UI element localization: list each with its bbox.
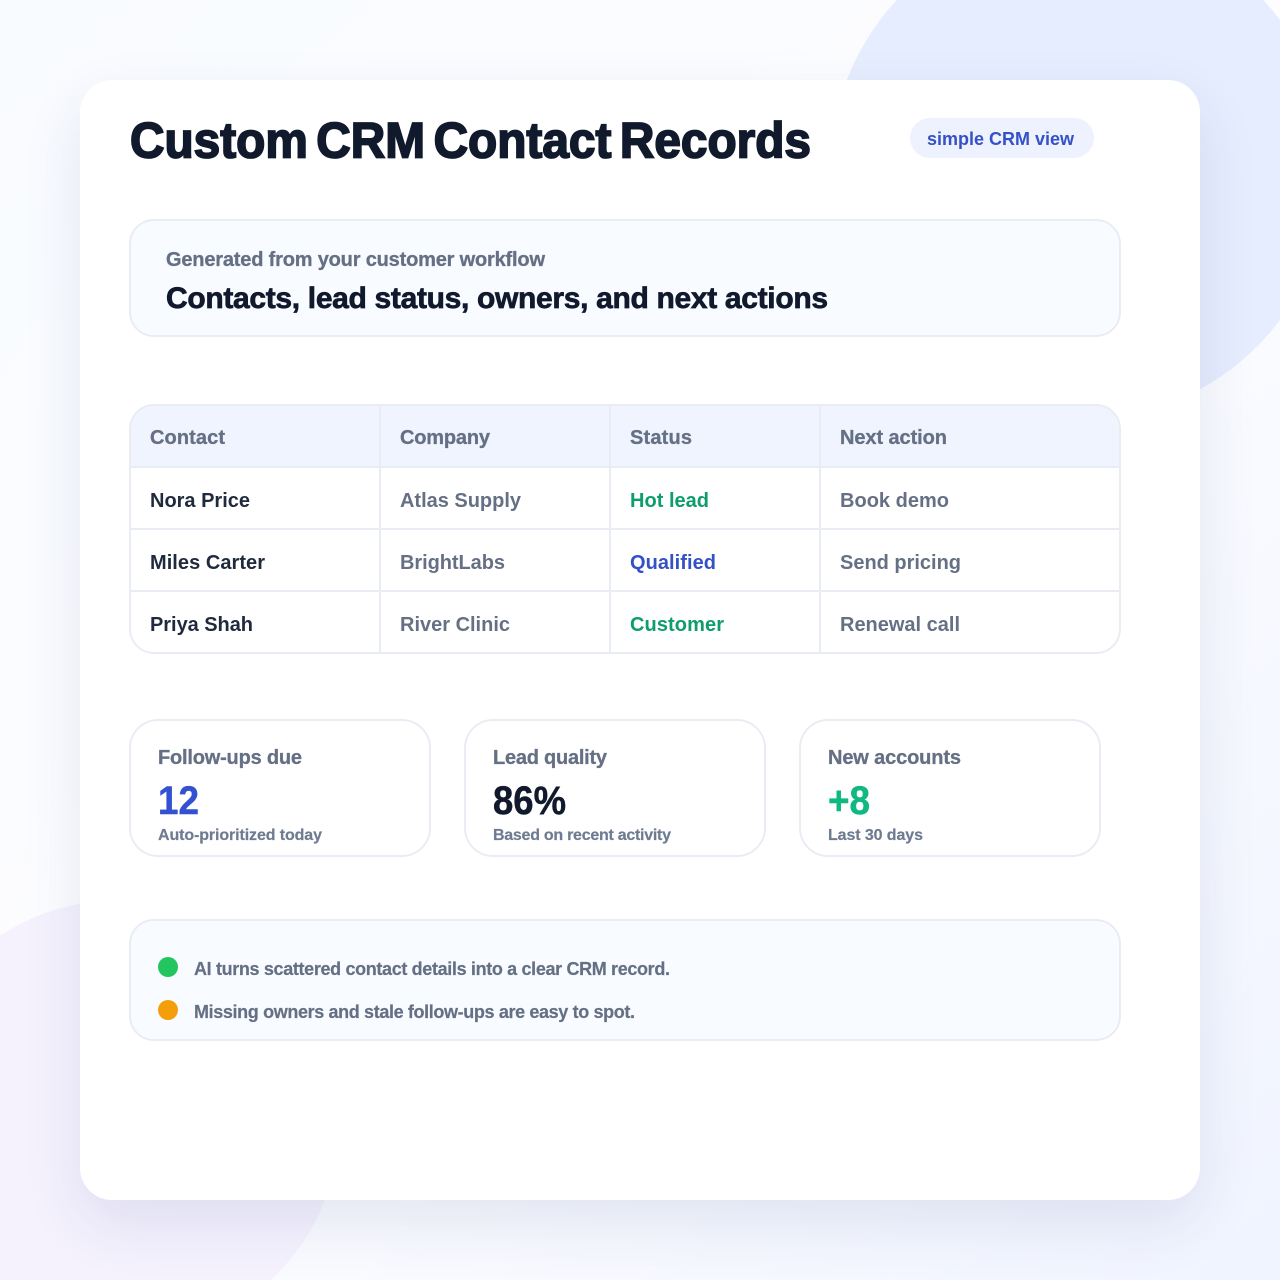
- badge: simple CRM view: [910, 118, 1094, 158]
- row: Priya Shah: Renewal call: [840, 614, 960, 636]
- insight two: Missing owners and stale follow-ups are easy to spot.: [194, 1002, 635, 1022]
- metric card: follow-ups due: Auto-prioritized today: [158, 827, 322, 844]
- row: Miles Carter: [150, 552, 961, 574]
- table header: Status: [630, 427, 692, 449]
- table header: Company: [400, 427, 491, 449]
- row: Miles Carter: Send pricing: [840, 552, 961, 574]
- table header: Contact: [150, 427, 225, 449]
- metric card: lead quality: [465, 720, 765, 856]
- metric card: new accounts: [800, 720, 1100, 856]
- row: Miles Carter: Qualified: [630, 552, 716, 574]
- main card: [80, 80, 1200, 1200]
- metric card: new accounts: +8: [828, 779, 870, 823]
- row: Miles Carter: BrightLabs: [400, 552, 505, 574]
- background circle: top right: [830, 0, 1280, 420]
- summary headline: Contacts, lead status, owners, and next actions: [166, 282, 828, 315]
- row: Miles Carter: Miles Carter: [150, 552, 265, 574]
- metric card: lead quality: Lead quality: [493, 747, 608, 769]
- row: Priya Shah: Priya Shah: [150, 614, 253, 636]
- metric card: new accounts: New accounts: [828, 747, 961, 769]
- row: Nora Price: Atlas Supply: [400, 490, 522, 512]
- row: Nora Price: [150, 490, 949, 512]
- contacts table: [130, 405, 1120, 653]
- metric card: new accounts: Last 30 days: [828, 827, 923, 844]
- row: Nora Price: Nora Price: [150, 490, 250, 512]
- background circle: bottom left: [0, 900, 340, 1280]
- row: Priya Shah: [150, 614, 960, 636]
- row: Nora Price: Hot lead: [630, 490, 709, 512]
- table header: [150, 427, 947, 449]
- table header: Next action: [840, 427, 947, 449]
- metric card: follow-ups due: [130, 720, 430, 856]
- metric card: lead quality: 86%: [493, 779, 566, 823]
- row: Nora Price: Book demo: [840, 490, 949, 512]
- icon: orange dot: [158, 1000, 178, 1020]
- icon: green dot: [158, 957, 178, 977]
- metric card: follow-ups due: Follow-ups due: [158, 747, 302, 769]
- row: Priya Shah: River Clinic: [400, 614, 510, 636]
- summary eyebrow: Generated from your customer workflow: [166, 249, 545, 271]
- title: Custom CRM Contact Records: [130, 112, 811, 168]
- metric card: lead quality: Based on recent activity: [493, 827, 671, 844]
- panel: summary: [130, 220, 1120, 336]
- row: Priya Shah: Customer: [630, 614, 724, 636]
- badge: simple CRM view: simple CRM view: [927, 129, 1075, 149]
- panel: insights: [130, 920, 1120, 1040]
- metric card: follow-ups due: 12: [158, 779, 199, 823]
- insight one: AI turns scattered contact details into a clear CRM record.: [194, 959, 670, 979]
